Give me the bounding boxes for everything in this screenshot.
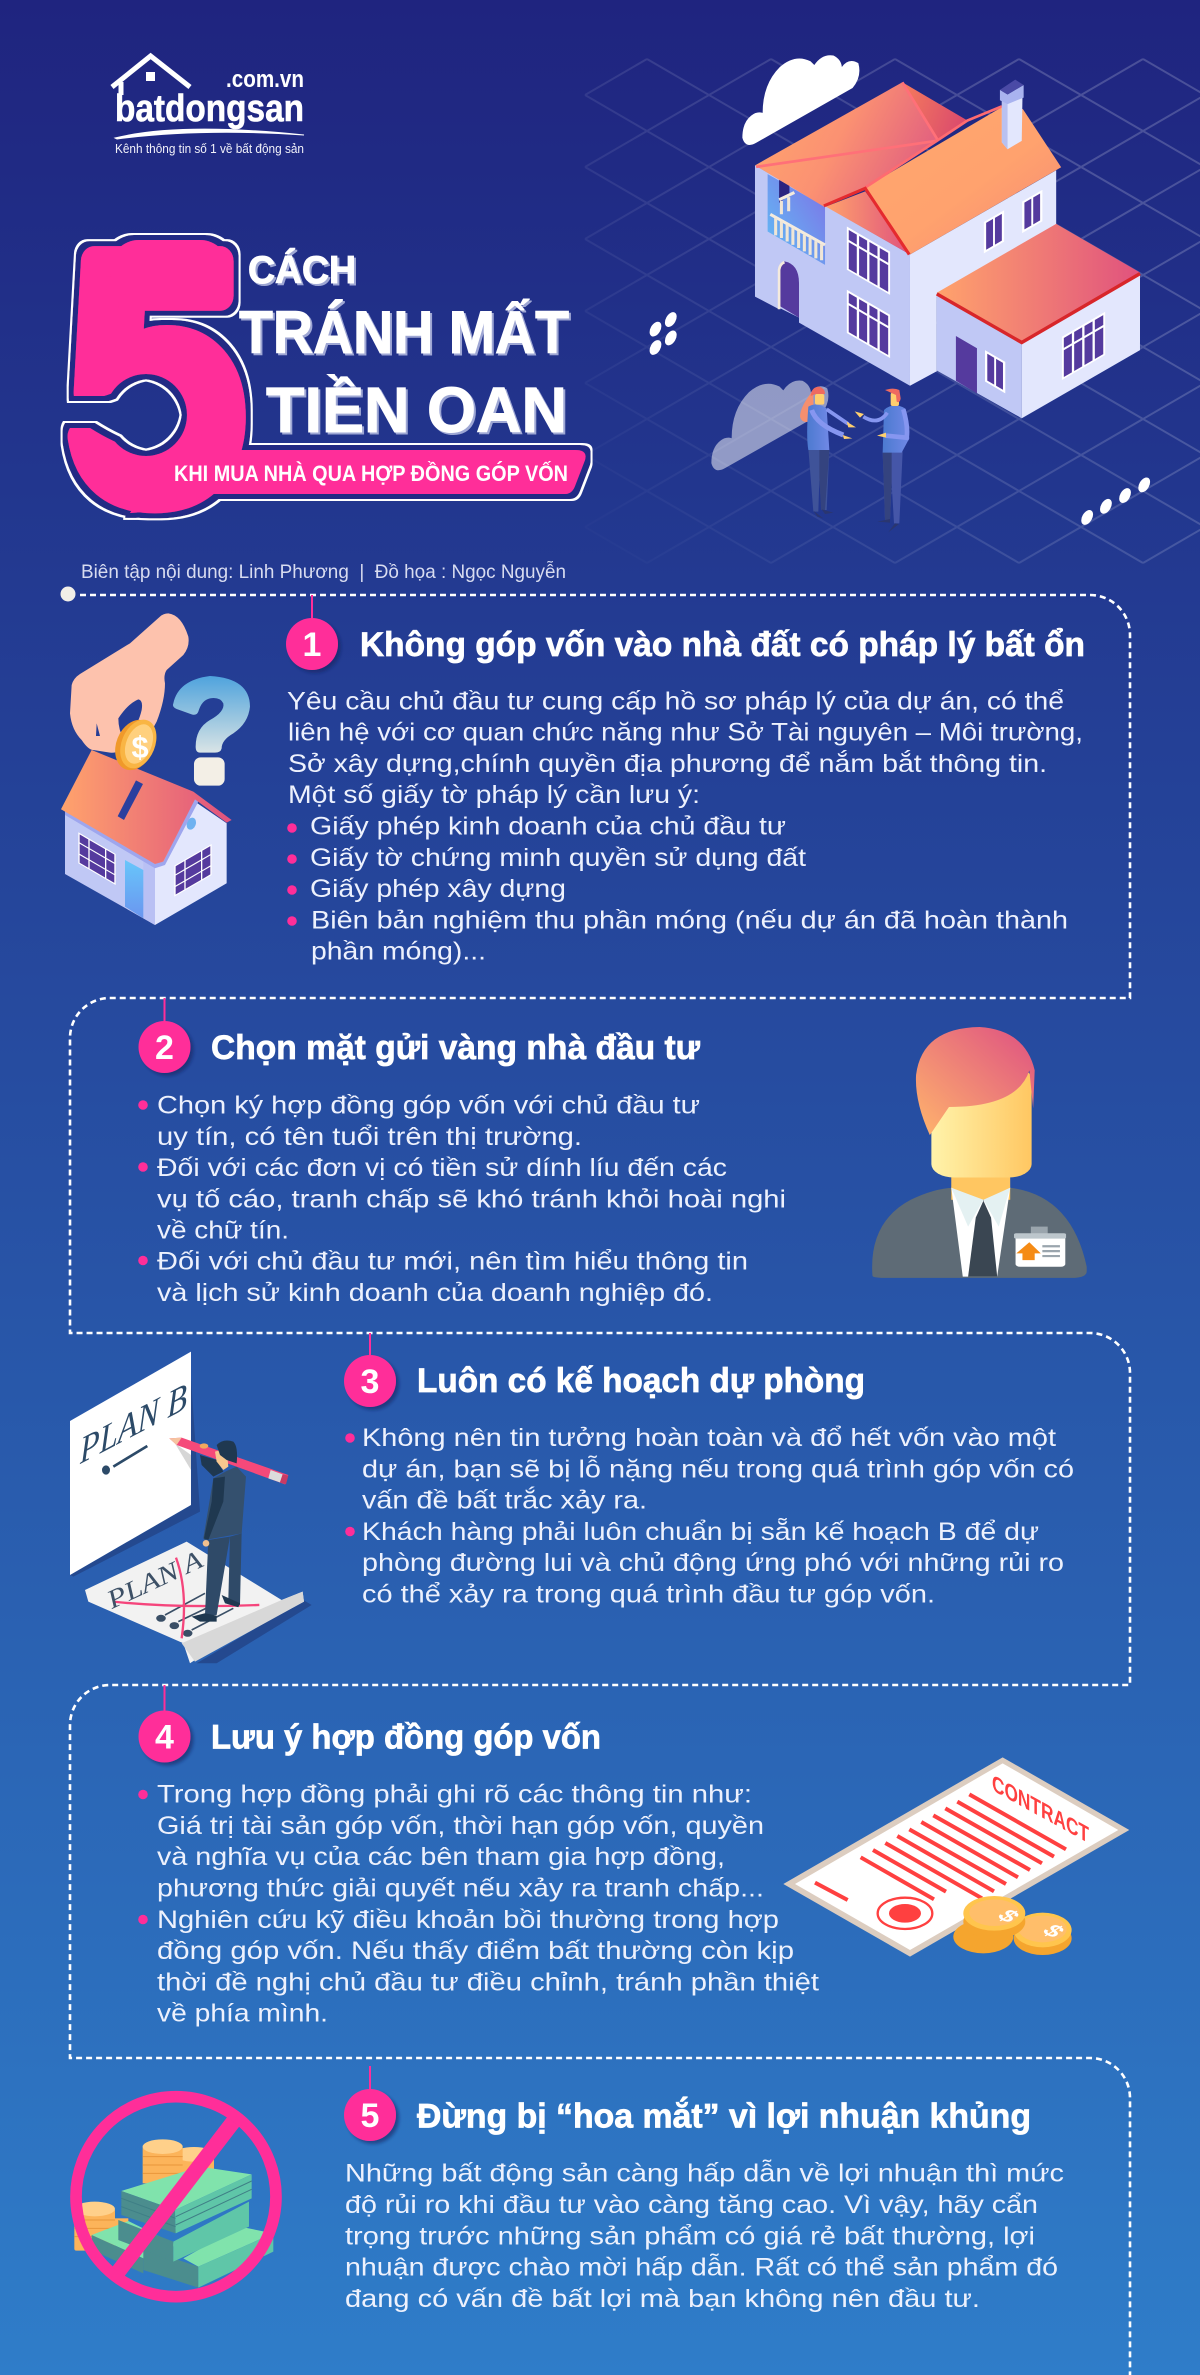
body text 2: uy tín, có tên tuổi trên thị trường. [157, 1123, 582, 1151]
body text 5: nhuận được chào mời hấp dẫn. Rất có thể sản phẩm đó [345, 2253, 1058, 2282]
pencil shadow [175, 1443, 191, 1470]
body text 1: liên hệ với cơ quan chức năng như Sở Tài nguyên – Môi trường, [288, 719, 1083, 747]
illustration: plan B [70, 1352, 312, 1663]
icon: hand dropping coin into house [61, 613, 250, 925]
icon: dots lower right [1079, 475, 1153, 527]
house door [125, 860, 143, 918]
title word: tránh mất: TRÁNH MẤT [239, 299, 569, 366]
garage roof [937, 224, 1140, 342]
panel: section 5 [74, 2066, 1064, 2313]
body text 3: Khách hàng phải luôn chuẩn bị sẵn kế hoạch B để dự [362, 1517, 1039, 1546]
icon: businessman with badge [872, 1027, 1087, 1278]
illustration: contract with coins [783, 1757, 1129, 1957]
number badge 5 [344, 2066, 396, 2141]
logo tagline: Kênh thông tin số 1 về bất động sản [115, 142, 304, 156]
house right wall [155, 802, 227, 925]
coin columns [74, 2139, 214, 2251]
icon: grey cloud [711, 381, 828, 470]
body text 1: Giấy phép xây dựng [310, 875, 566, 903]
contract sheet [795, 1763, 1118, 1950]
hand [70, 613, 189, 753]
banknote middle stack [118, 2202, 249, 2262]
garage left wall [937, 293, 1022, 418]
icon: white cloud [742, 55, 859, 145]
question dot [194, 757, 225, 786]
right main roof [865, 107, 1061, 254]
pencil [169, 1438, 288, 1484]
panel: section 2 [138, 998, 1087, 1307]
man head [215, 1448, 228, 1470]
prohibition ring [76, 2097, 276, 2297]
panel: section 1 [61, 595, 1085, 966]
plan A text: PLAN A [101, 1545, 207, 1615]
number badge 4: 4 [155, 1718, 174, 1756]
banknote top stack [121, 2167, 252, 2233]
roof ridges [756, 82, 938, 167]
number badge 3: 3 [361, 1363, 379, 1401]
body text 5 [345, 2159, 1064, 2313]
house right wall [910, 170, 1056, 386]
red cross [113, 1558, 259, 1638]
icon: man [855, 389, 909, 532]
bullets 4 [138, 1790, 148, 1924]
body text 2: vụ tố cáo, tranh chấp sẽ khó tránh khỏi hoài nghi [157, 1185, 786, 1213]
body text 5: Những bất động sản càng hấp dẫn về lợi nhuận thì mức [345, 2159, 1064, 2188]
front gable [826, 191, 910, 254]
coin dollar signs: $ [991, 1906, 1026, 1926]
body text 3: vấn đề bất trắc xảy ra. [362, 1486, 647, 1515]
contract lines [815, 1794, 1066, 1900]
body text 3: phòng đường lui và chủ động ứng phó với những rủi ro [362, 1549, 1064, 1577]
heading 2: Chọn mặt gửi vàng nhà đầu tư [211, 1029, 700, 1067]
man arm [200, 1455, 223, 1477]
icon: money prohibited [74, 2097, 276, 2297]
house left wall [755, 165, 910, 386]
contract title: CONTRACT [992, 1770, 1089, 1849]
icon: woman [800, 387, 856, 518]
subtitle ribbon [130, 450, 586, 513]
body text 3: dự án, bạn sẽ bị lỗ nặng nếu trong quá trình góp vốn có [362, 1454, 1074, 1483]
neck [951, 1173, 1010, 1200]
roof [61, 750, 232, 864]
isometric grid backdrop [585, 59, 1200, 563]
garage windows [985, 350, 1005, 393]
man legs [205, 1537, 230, 1615]
body text 3: có thể xảy ra trong quá trình đầu tư góp vốn. [362, 1580, 935, 1608]
sheet shadow [70, 1378, 200, 1577]
prohibition slash [118, 2122, 233, 2272]
subtitle: KHI MUA NHÀ QUA HỢP ĐỒNG GÓP VỐN [174, 460, 568, 486]
left windows [847, 227, 890, 295]
suit [872, 1188, 1087, 1278]
coin dollar sign: $ [131, 730, 149, 764]
number badge 1 [286, 595, 338, 670]
number badge 3 [344, 1333, 396, 1407]
house left wall [65, 813, 155, 925]
banknote lower right stack [143, 2227, 273, 2288]
plan B line [113, 1446, 147, 1467]
man jacket [203, 1467, 246, 1540]
logo wordmark: batdongsan [115, 88, 304, 130]
icon: dots near title [647, 310, 679, 357]
man hand [203, 1540, 209, 1547]
contract seal [878, 1898, 932, 1929]
bullets 1 [287, 823, 297, 926]
body text 4: Nghiên cứu kỹ điều khoản bồi thường trong hợp [157, 1906, 779, 1934]
plan B sheet group [70, 1352, 312, 1663]
banknote lower left stack [92, 2221, 177, 2273]
heading 3: Luôn có kế hoạch dự phòng [417, 1362, 865, 1400]
body text 1 [287, 687, 1083, 966]
heading 4: Lưu ý hợp đồng góp vốn [211, 1719, 601, 1757]
dashed connector path [70, 595, 1130, 2375]
body text 2: và lịch sử kinh doanh của doanh nghiệp đó. [157, 1279, 713, 1307]
body text 4: đồng góp vốn. Nếu thấy điểm bất thường còn kịp [157, 1937, 794, 1965]
numeral 5 with carved bowl: 5 [72, 188, 241, 568]
illustration: isometric house with clouds [647, 55, 1153, 527]
body text 2: Đối với các đơn vị có tiền sử dính líu đến các [157, 1154, 727, 1182]
upper right windows [984, 210, 1004, 253]
tie [968, 1201, 997, 1277]
plan B sheet [70, 1352, 191, 1575]
logo swoosh [115, 129, 304, 139]
roof trim [65, 798, 198, 868]
body text 2: Đối với chủ đầu tư mới, nên tìm hiểu thông tin [157, 1248, 748, 1276]
body text 4: Trong hợp đồng phải ghi rõ các thông tin như: [157, 1781, 752, 1809]
number badge 2: 2 [155, 1029, 174, 1067]
body text 2: về chữ tín. [157, 1216, 289, 1244]
garage right wall [1022, 274, 1140, 418]
bullets 2 [138, 1100, 148, 1265]
body text 1: Sở xây dựng,chính quyền địa phương để nắm bắt thông tin. [288, 749, 1047, 778]
coin [108, 714, 162, 776]
man shoes [192, 1613, 217, 1622]
start dot [60, 586, 76, 602]
number badge 1: 1 [303, 626, 321, 664]
door frame [779, 262, 784, 309]
body text 4: phương thức giải quyết nếu xảy ra tranh chấp... [157, 1874, 764, 1902]
gable edge [824, 188, 909, 254]
logo domain: .com.vn [226, 66, 304, 93]
body text 1: Yêu cầu chủ đầu tư cung cấp hồ sơ pháp lý của dự án, có thể [287, 687, 1064, 715]
number badge 5: 5 [361, 2097, 379, 2135]
body text 3: Không nên tin tưởng hoàn toàn và đổ hết vốn vào một [362, 1424, 1056, 1452]
body text 5: độ rủi ro khi đầu tư vào càng tăng cao. Vì vậy, hãy cẩn [345, 2191, 1038, 2219]
panel: section 3 [70, 1333, 1074, 1663]
contract and coin shapes [783, 1757, 1129, 1957]
body text 1: Một số giấy tờ pháp lý cần lưu ý: [288, 781, 700, 809]
body text 1: Giấy phép kinh doanh của chủ đầu tư [310, 812, 786, 840]
title block [60, 233, 593, 520]
illustration: two people talking [800, 387, 909, 532]
title word: cách: CÁCH [248, 248, 356, 292]
plan A curled edge [182, 1592, 304, 1662]
number badge 2 [138, 998, 190, 1073]
plan B text: PLAN B [79, 1374, 187, 1473]
heading 1: Không góp vốn vào nhà đất có pháp lý bất ổn [360, 626, 1085, 664]
number badge 4 [138, 1685, 190, 1762]
left main roof [755, 82, 938, 207]
body text 1: phần móng)... [311, 938, 486, 966]
door strip [143, 860, 155, 925]
numeral 5 with carved bowl [60, 233, 253, 520]
head [931, 1066, 1032, 1177]
icon: logo house roof [112, 56, 190, 95]
round window [184, 816, 198, 832]
shirt [951, 1188, 1010, 1277]
icon: house [755, 80, 1140, 418]
main roof back piece [902, 82, 967, 140]
logo small window [146, 72, 155, 81]
body text 5: đang có vấn đề bất lợi mà bạn không nên đầu tư. [345, 2285, 980, 2313]
balcony [768, 174, 825, 265]
body text 4: và nghĩa vụ của các bên tham gia hợp đồng, [157, 1843, 725, 1871]
body text 1: Biên bản nghiệm thu phần móng (nếu dự án đã hoàn thành [311, 906, 1068, 934]
plan A sheet [85, 1542, 304, 1663]
logo: batdongsan.com.vn [112, 56, 304, 156]
coin slot [118, 780, 143, 820]
body text 2 [157, 1092, 786, 1307]
finger gaps [118, 699, 142, 740]
body text 4 [157, 1781, 819, 2028]
plan A dashed lines [157, 1593, 233, 1636]
big numeral 5 with subtitle ribbon [60, 233, 593, 520]
coins [1014, 1922, 1072, 1955]
body text 4: về phía mình. [157, 2000, 328, 2028]
hair [916, 1027, 1035, 1135]
body text 4: thời đề nghị chủ đầu tư điều chỉnh, tránh phần thiệt [157, 1968, 819, 1996]
body text 2: Chọn ký hợp đồng góp vốn với chủ đầu tư [157, 1092, 700, 1120]
credits: Biên tập nội dung: Linh Phương | Đồ họa : Ngọc Nguyễn [81, 560, 566, 583]
contract border [783, 1757, 1129, 1957]
garage roof edge [937, 274, 1140, 343]
roof ridge line [865, 106, 1002, 188]
badge [1014, 1227, 1066, 1267]
panel: section 4 [138, 1685, 1129, 2028]
body text 3 [362, 1424, 1074, 1608]
body text 5: trọng trước những sản phẩm có giá rẻ bất thường, lợi [345, 2222, 1035, 2250]
contract and coin shapes: $ [1036, 1921, 1071, 1941]
heading 5: Đừng bị “hoa mắt” vì lợi nhuận khủng [417, 2098, 1031, 2136]
house windows [78, 832, 116, 885]
garage door [956, 336, 977, 393]
arched door [780, 261, 799, 318]
chimney [1000, 80, 1024, 149]
title word: tiền oan: TIỀN OAN [266, 374, 567, 446]
question mark [173, 676, 250, 753]
plan A shadow [197, 1600, 312, 1663]
body text 1: Giấy tờ chứng minh quyền sử dụng đất [310, 844, 806, 872]
bullets 3 [345, 1433, 355, 1536]
body text 4: Giá trị tài sản góp vốn, thời hạn góp vốn, quyền [157, 1812, 764, 1840]
